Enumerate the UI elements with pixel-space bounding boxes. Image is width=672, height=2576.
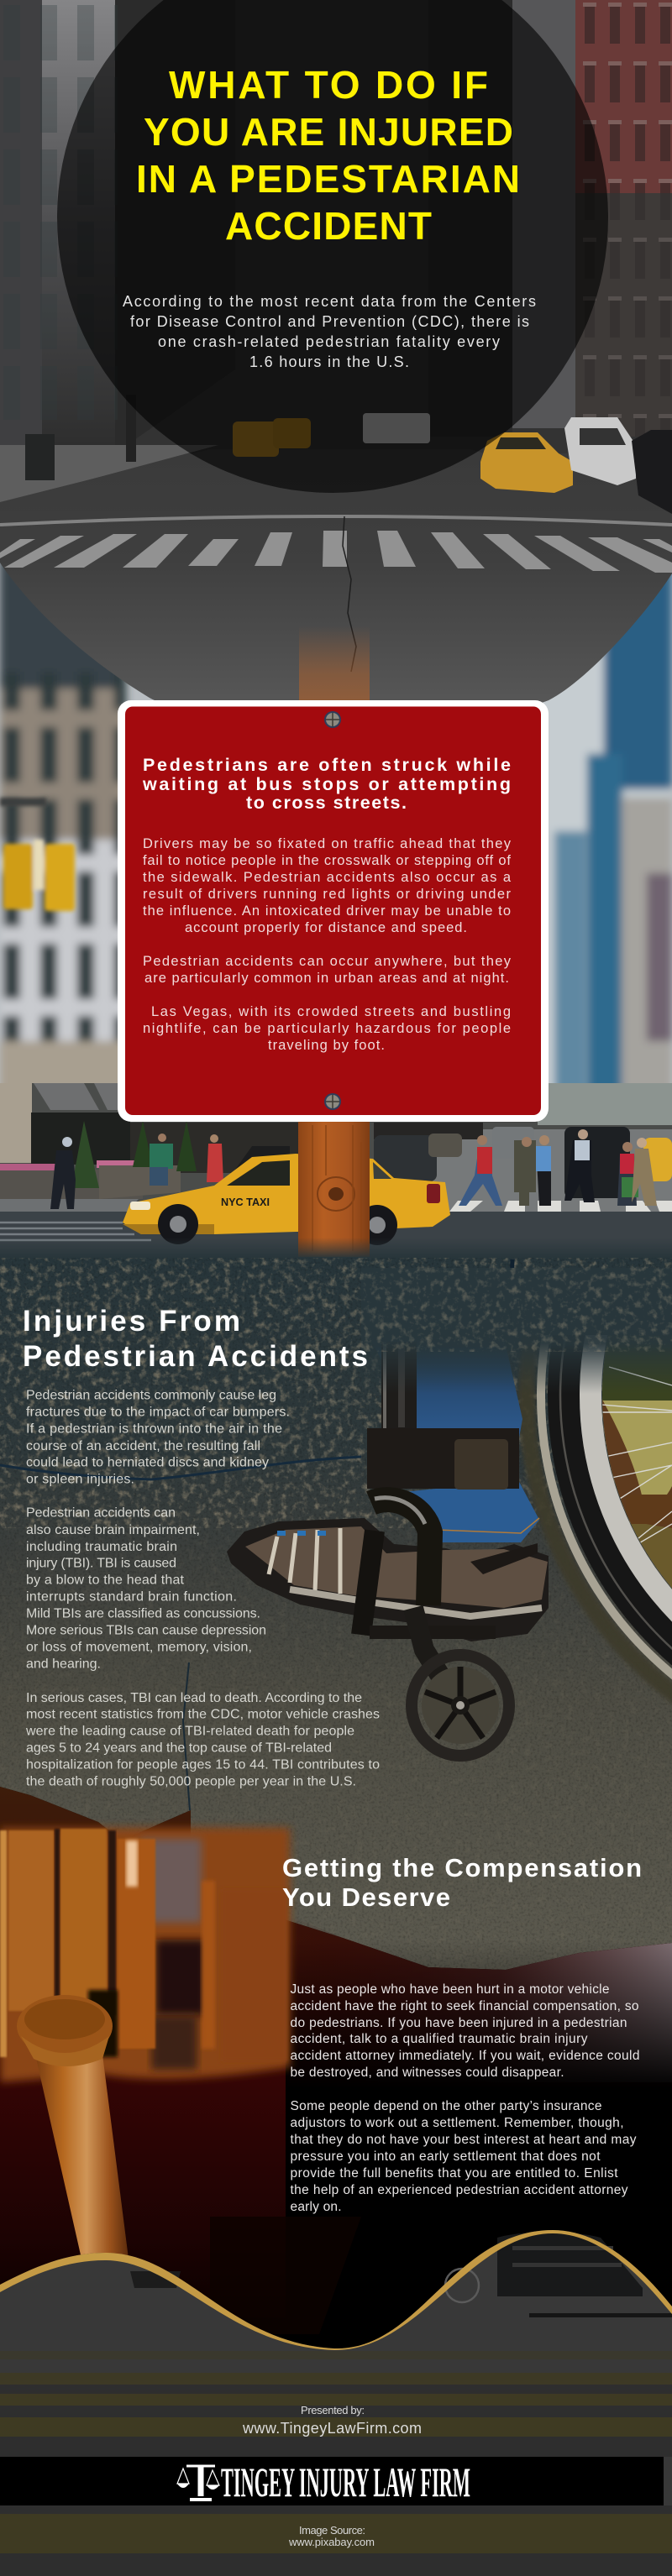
- intro text: for Disease Control and Prevention (CDC), there is: [130, 313, 529, 330]
- icon: bottom screw: [324, 1093, 341, 1110]
- pedestrians: [50, 1129, 657, 1209]
- injuries body text: ages 5 to 24 years and the top cause of TBI-related: [26, 1741, 332, 1756]
- icon: top screw: [324, 711, 341, 728]
- crosswalk stripes: [0, 531, 672, 573]
- compensation body text: that they do not have your best interest at heart and may: [291, 2133, 637, 2147]
- injuries body text: Pedestrian accidents commonly cause leg: [26, 1389, 276, 1402]
- intro text: [123, 293, 536, 370]
- sign body text: account properly for distance and speed.: [185, 920, 467, 935]
- taxi door text: NYC TAXI: [221, 1196, 270, 1208]
- compensation body text: adjustors to work out a settlement. Remember, though,: [291, 2116, 623, 2130]
- jeans leg: [370, 1338, 522, 1437]
- gavel head: [0, 1828, 290, 2082]
- illustration: leg, shoe and caster: [227, 1338, 549, 1756]
- title: IN A PEDESTARIAN: [136, 157, 520, 201]
- road crack: [343, 516, 356, 672]
- faded yellow road stripes: [0, 2351, 672, 2553]
- sign heading: [142, 755, 511, 813]
- compensation body text: [291, 1982, 640, 2214]
- injuries body text: or spleen injuries.: [26, 1473, 134, 1486]
- parked cars: [231, 1127, 672, 1198]
- traffic light: [0, 798, 75, 911]
- panel: red road sign: [118, 700, 549, 1122]
- compensation body text: accident attorney immediately. If you wait, evidence could: [291, 2049, 640, 2063]
- injuries body text: Mild TBIs are classified as concussions.: [26, 1606, 260, 1620]
- presented by credit: [242, 2404, 422, 2437]
- street vehicles: [233, 413, 672, 514]
- top road scene with curved lower edge: [0, 0, 672, 756]
- panel: injuries concrete background: [0, 1238, 672, 1973]
- injuries body text: interrupts standard brain function.: [26, 1590, 237, 1605]
- compensation body text: accident, talk to a qualified traumatic brain injury: [291, 2032, 588, 2046]
- shop front with awnings: [0, 1083, 483, 1173]
- gavel handle: [17, 1995, 129, 2259]
- sign body text: result of drivers running red lights or driving under: [143, 887, 511, 902]
- presented by credit: www.TingeyLawFirm.com: [242, 2420, 422, 2437]
- planters with flowers: [0, 1121, 197, 1199]
- injuries body text: by a blow to the head that: [26, 1573, 185, 1588]
- compensation body text: provide the full benefits that you are entitled to. Enlist: [291, 2166, 618, 2181]
- intro text: one crash-related pedestrian fatality every: [158, 333, 500, 350]
- heading: injuries: Pedestrian Accidents: [23, 1340, 368, 1373]
- image source credit: www.pixabay.com: [288, 2536, 375, 2548]
- sign body text: Drivers may be so fixated on traffic ahead that they: [143, 836, 512, 851]
- sign body text: the influence. An intoxicated driver may be unable to: [143, 903, 511, 919]
- logo bar: [0, 2457, 664, 2505]
- icon: scales of justice: [177, 2466, 219, 2500]
- gold wave line: [0, 2230, 672, 2350]
- compensation body text: Just as people who have been hurt in a motor vehicle: [291, 1982, 610, 1997]
- compensation body text: pressure you into an early settlement that does not: [291, 2149, 601, 2164]
- sign heading: Pedestrians are often struck while: [143, 755, 511, 775]
- injuries body text: Pedestrian accidents can: [26, 1506, 176, 1521]
- compensation body text: accident have the right to seek financial compensation, so: [291, 1999, 638, 2013]
- compensation body text: be destroyed, and witnesses could disappear.: [291, 2066, 564, 2080]
- right skyscrapers: [538, 554, 672, 1125]
- caster wheel: [412, 1655, 509, 1756]
- sign body text: [143, 836, 512, 1053]
- background car and pedestrians: [130, 2232, 672, 2317]
- sign body text: Las Vegas, with its crowded streets and bustling: [151, 1004, 511, 1019]
- yellow NYC taxi: [123, 1154, 450, 1245]
- injuries body text: injury (TBI). TBI is caused: [26, 1557, 176, 1570]
- shoe: [227, 1518, 549, 1641]
- sidewalk: [0, 395, 218, 504]
- caster fork: [413, 1608, 460, 1708]
- injuries body text: course of an accident, the resulting fall: [26, 1439, 260, 1453]
- injuries body text: were the leading cause of TBI-related death for people: [25, 1725, 354, 1738]
- sign body text: fail to notice people in the crosswalk or stepping off of: [143, 853, 511, 868]
- injuries body text: If a pedestrian is thrown into the air in the: [26, 1422, 282, 1437]
- blend: dark concrete over wheelchair top: [361, 1268, 672, 1394]
- injuries body text: including traumatic brain: [26, 1540, 177, 1554]
- injuries body text: In serious cases, TBI can lead to death. According to the: [26, 1691, 362, 1705]
- injuries body text: also cause brain impairment,: [26, 1523, 200, 1537]
- intro text: According to the most recent data from the Centers: [123, 293, 536, 310]
- sign body text: the sidewalk. Pedestrian accidents also occur as a: [143, 870, 512, 885]
- image source credit: [288, 2524, 375, 2548]
- heading: compensation: Getting the Compensation: [282, 1853, 642, 1882]
- sign body text: traveling by foot.: [268, 1038, 385, 1053]
- heading: injuries: [23, 1305, 368, 1373]
- frame bent tube: [371, 1500, 430, 1605]
- sign heading: waiting at bus stops or attempting: [142, 774, 511, 794]
- heading: compensation: [282, 1853, 642, 1912]
- sign body text: are particularly common in urban areas and at night.: [144, 971, 509, 986]
- injuries body text: most recent statistics from the CDC, motor vehicle crashes: [26, 1707, 380, 1721]
- street background buildings: [0, 0, 672, 453]
- jeans cuff: [403, 1480, 539, 1542]
- street-level scene: [0, 1083, 672, 1262]
- background: blurred city scene: [0, 554, 672, 1276]
- image source credit: Image Source:: [299, 2524, 365, 2537]
- intro text: 1.6 hours in the U.S.: [249, 353, 409, 370]
- title: YOU ARE INJURED: [144, 110, 513, 154]
- heading: compensation: You Deserve: [282, 1882, 450, 1912]
- road marking line: [0, 516, 672, 525]
- title: ACCIDENT: [225, 204, 432, 248]
- road and crosswalk: [0, 1201, 672, 1262]
- panel: gavel background: [0, 1787, 672, 2338]
- panel: bottom road area: [0, 2230, 672, 2576]
- road surface: [0, 479, 672, 702]
- title: WHAT TO DO IF: [169, 63, 488, 107]
- presented by credit: Presented by:: [301, 2404, 365, 2416]
- left building: [0, 554, 126, 1159]
- compensation body text: the help of an experienced pedestrian accident attorney: [291, 2183, 628, 2197]
- injuries body text: More serious TBIs can cause depression: [26, 1623, 266, 1637]
- illustration: wheelchair wheel: [518, 1343, 672, 1704]
- injuries body text: or loss of movement, memory, vision,: [26, 1641, 252, 1654]
- injuries body text: and hearing.: [26, 1657, 101, 1672]
- sign body text: nightlife, can be particularly hazardous for people: [143, 1021, 511, 1036]
- heading: injuries: Injuries From: [23, 1305, 240, 1338]
- sidewalk: [0, 1199, 139, 1222]
- dark circle overlay: [57, 0, 608, 493]
- compensation body text: Some people depend on the other party’s insurance: [291, 2099, 601, 2113]
- compensation body text: do pedestrians. If you have been injured in a pedestrian: [291, 2016, 627, 2030]
- injuries body text: could lead to herniated discs and kidney: [26, 1455, 269, 1469]
- injuries body text: the death of roughly 50,000 people per year in the U.S.: [26, 1774, 356, 1788]
- wooden sign post: [298, 621, 370, 1257]
- injuries body text: hospitalization for people ages 15 to 44. TBI contributes to: [26, 1758, 380, 1772]
- sign heading: to cross streets.: [246, 793, 407, 813]
- injuries body text: [25, 1389, 380, 1788]
- post glow on road: [299, 631, 370, 700]
- frame tube: [381, 1342, 417, 1429]
- compensation body text: early on.: [291, 2200, 341, 2214]
- sign body text: Pedestrian accidents can occur anywhere, but they: [143, 954, 512, 969]
- injuries body text: fractures due to the impact of car bumpers.: [26, 1406, 290, 1420]
- title: [136, 63, 520, 248]
- ankle strap: [367, 1428, 519, 1490]
